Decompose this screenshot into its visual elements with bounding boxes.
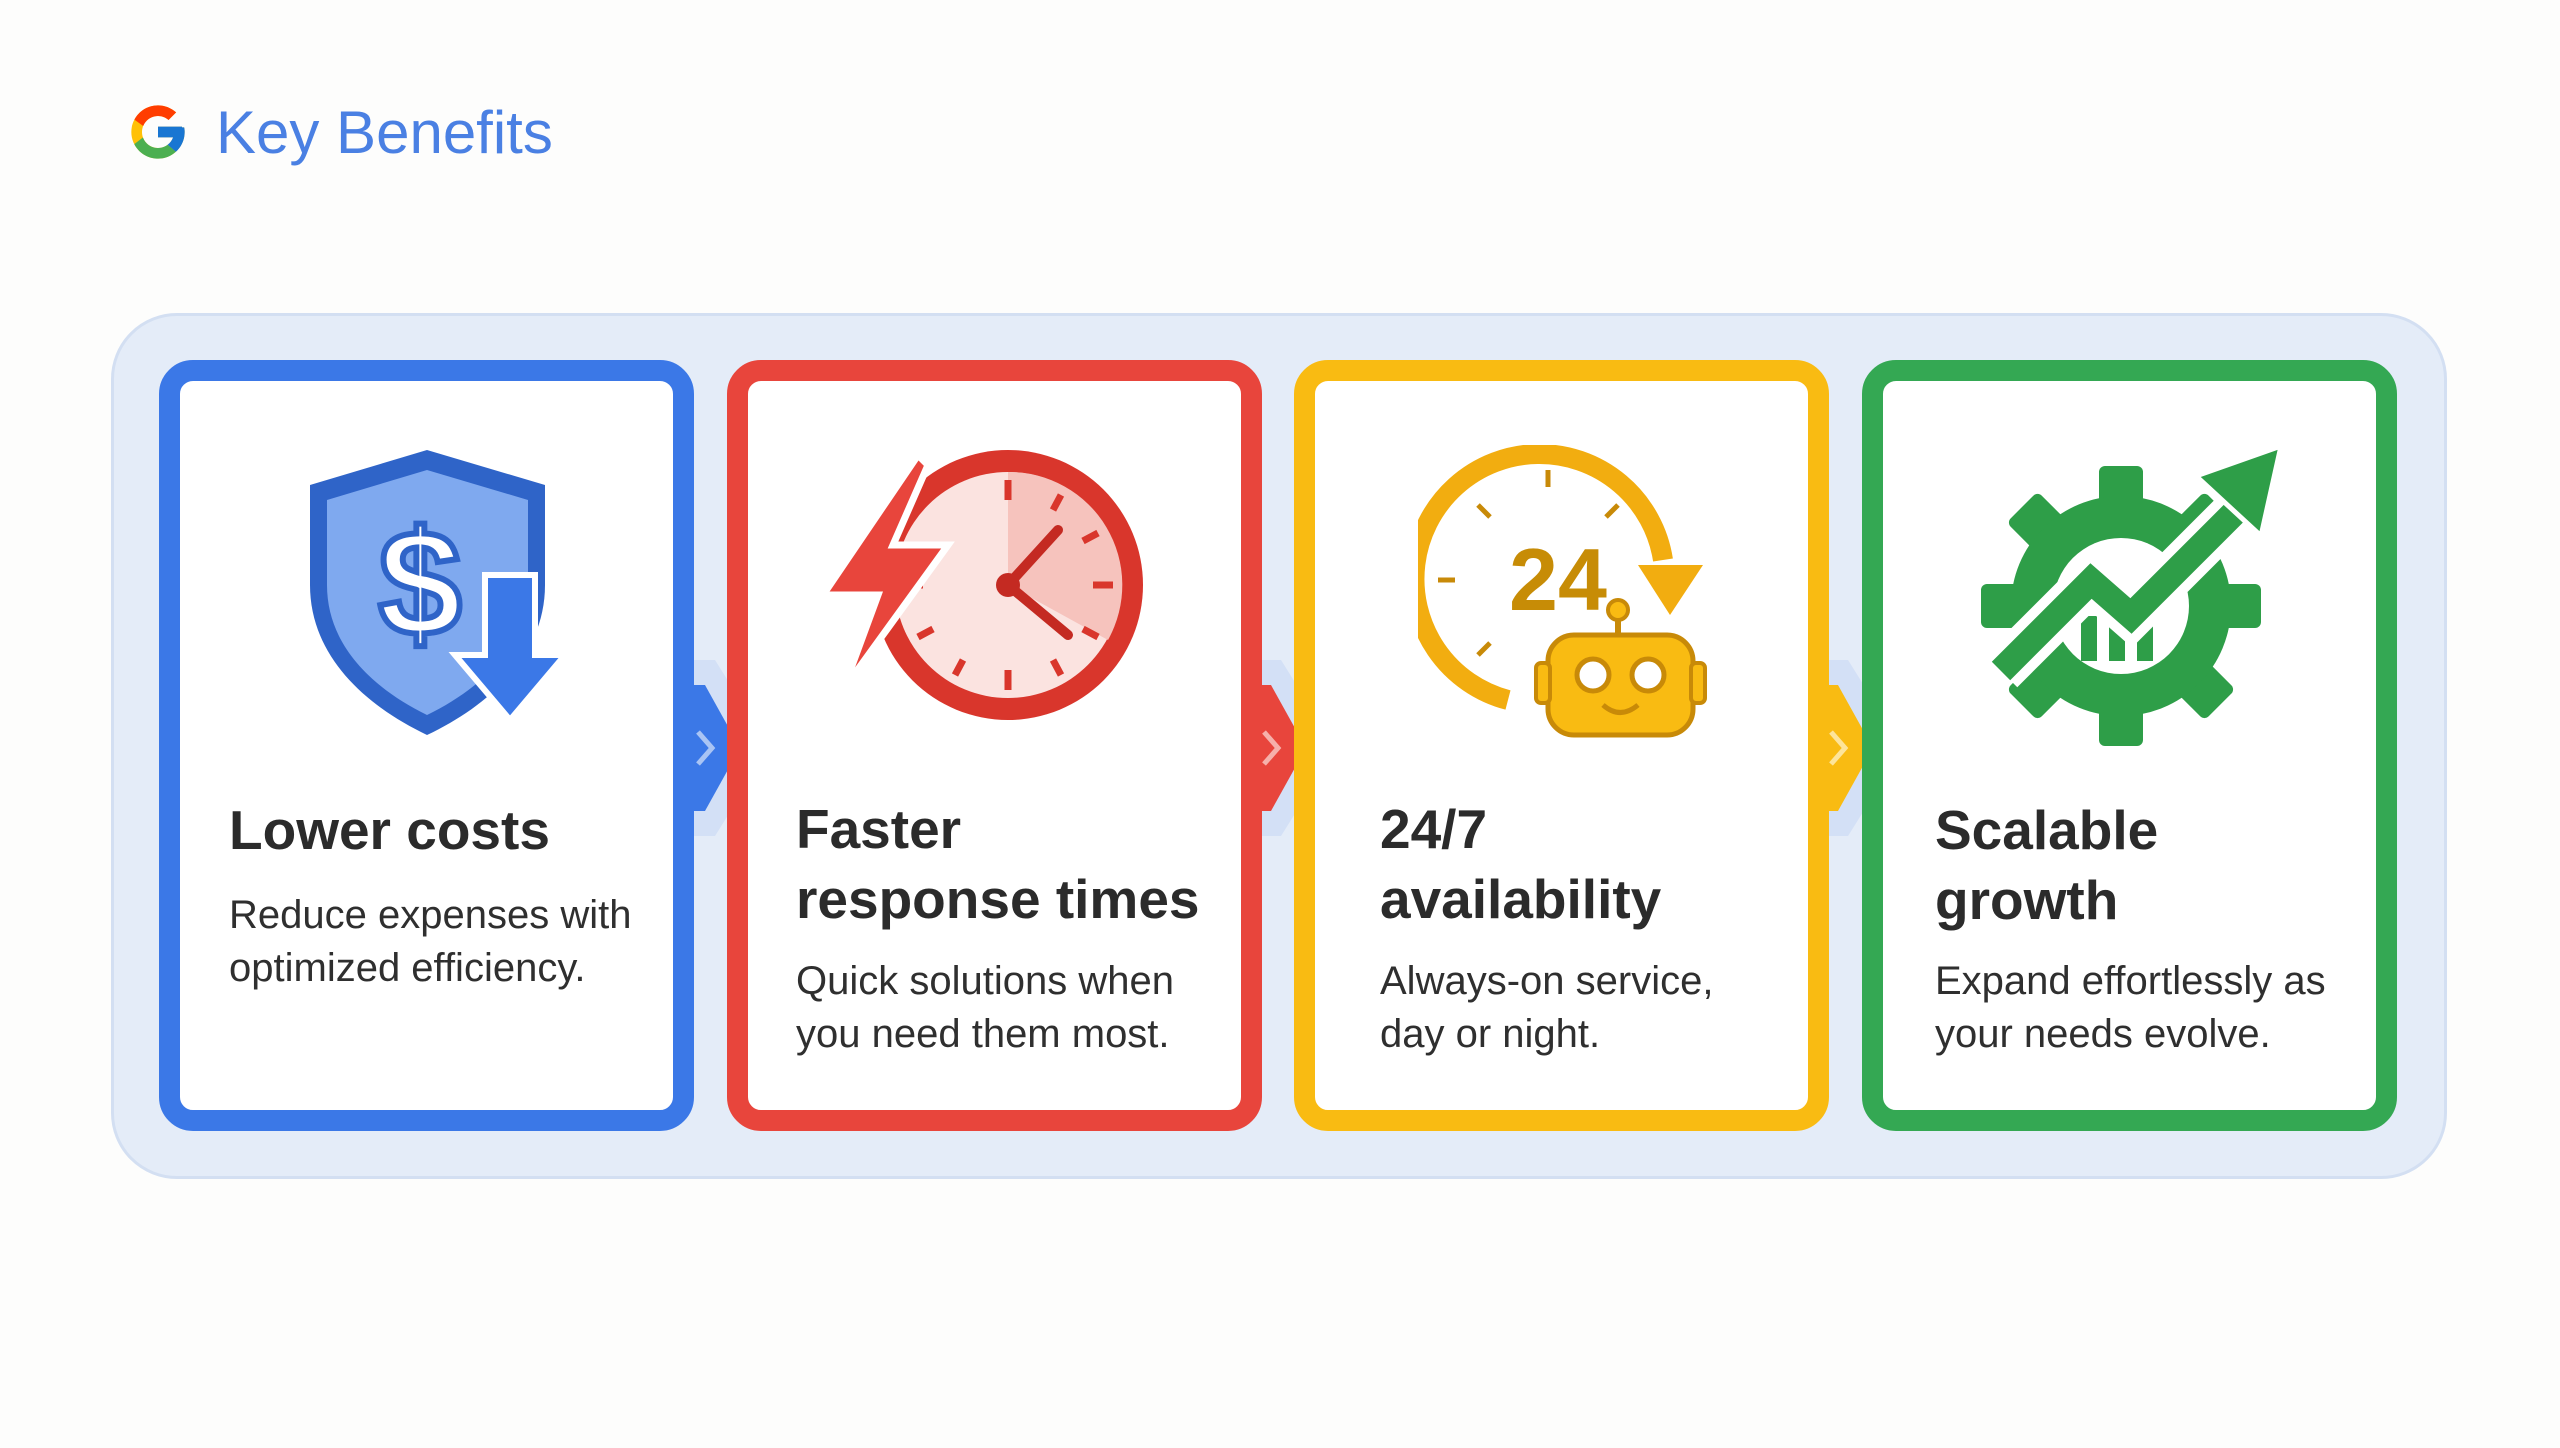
heading: 24/7 availability: 24/7	[1380, 798, 1487, 860]
icon: gear growth	[1981, 450, 2278, 746]
icon: clock lightning	[830, 450, 1143, 720]
heading: faster response times	[796, 798, 1200, 930]
text: availability description: Always-on service,	[1380, 959, 1713, 1003]
heading: 24/7 availability	[1380, 798, 1661, 930]
icon: 24 robot: 24	[1509, 530, 1607, 629]
heading: scalable growth	[1935, 799, 2158, 931]
text: faster description: you need them most.	[796, 1012, 1170, 1056]
text: faster description: Quick solutions when	[796, 959, 1174, 1003]
icon: google G	[131, 105, 185, 159]
panel: 24/7 availability	[1294, 360, 1829, 1131]
panel: faster response	[727, 360, 1262, 1131]
text: availability description: day or night.	[1380, 1012, 1600, 1056]
text: lower costs description: Reduce expenses with	[229, 893, 631, 937]
heading: faster response times: response times	[796, 868, 1200, 930]
heading: scalable growth: growth	[1935, 869, 2118, 931]
text: growth description: your needs evolve.	[1935, 1012, 2271, 1056]
heading: lower costs: Lower costs	[229, 799, 550, 861]
panel: scalable growth	[1862, 360, 2397, 1131]
text: faster description	[796, 959, 1174, 1056]
heading: faster response times: Faster	[796, 798, 961, 860]
text: growth description: Expand effortlessly as	[1935, 959, 2326, 1003]
panel: lower costs	[159, 360, 694, 1131]
text: availability description	[1380, 959, 1713, 1056]
arrow: connector 2	[1262, 660, 1294, 836]
icon: shield dollar: $	[378, 499, 462, 667]
heading: scalable growth: Scalable	[1935, 799, 2158, 861]
arrow: connector 3	[1829, 660, 1862, 836]
icon: shield dollar	[310, 450, 558, 735]
heading: 24/7 availability: availability	[1380, 868, 1661, 930]
text: lower costs description	[229, 893, 631, 990]
title: Key Benefits	[216, 99, 553, 166]
text: lower costs description: optimized efficiency.	[229, 946, 585, 990]
icon: 24 robot	[1418, 445, 1707, 738]
text: growth description	[1935, 959, 2326, 1056]
panel: background container	[111, 313, 2447, 1179]
arrow: connector 1	[694, 660, 727, 836]
